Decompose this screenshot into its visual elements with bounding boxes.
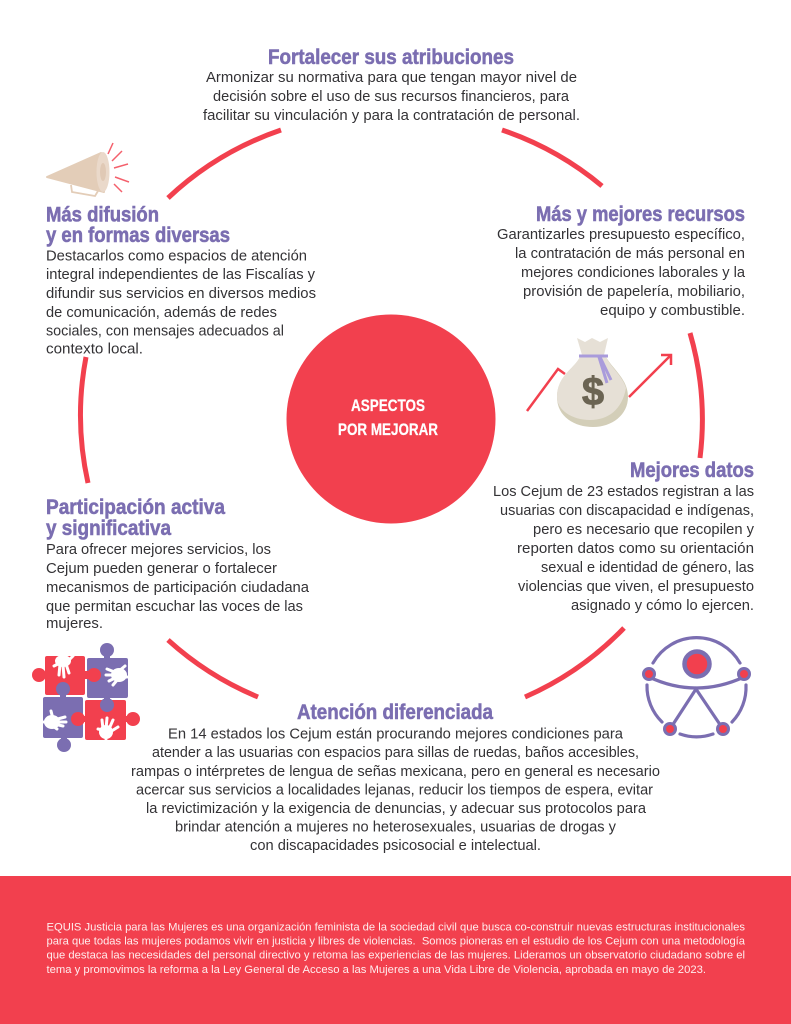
section: más difusión: Más difusión [46, 204, 159, 226]
section: participación activa: que permitan escuchar las voces de las [46, 599, 303, 615]
section: más y mejores recursos: equipo y combustible. [600, 303, 745, 319]
section: mejores datos: pero es necesario que recopilen y [533, 522, 755, 538]
section: más difusión: y en formas diversas [46, 224, 230, 247]
section: mejores datos: Los Cejum de 23 estados registran a las [493, 484, 754, 500]
section: mejores datos [493, 459, 755, 614]
section: más y mejores recursos [497, 203, 746, 319]
section: fortalecer sus atribuciones: Fortalecer sus atribuciones [268, 46, 514, 69]
center circle: aspectos por mejorar: ASPECTOS [351, 397, 425, 415]
section: más difusión [46, 204, 316, 358]
section: mejores datos: violencias que viven, el presupuesto [518, 579, 754, 595]
section: más y mejores recursos: Más y mejores recursos [536, 203, 745, 226]
section: atención diferenciada: con discapacidades psicosocial e intelectual. [250, 838, 541, 854]
section: más difusión: integral independientes de las Fiscalías y [46, 267, 316, 283]
section: más y mejores recursos: la contratación de más personal en [515, 246, 745, 262]
icon: money bag with rising arrow: $ [582, 370, 604, 414]
section: participación activa [46, 496, 310, 632]
ring of arc segments [81, 130, 702, 697]
section: atención diferenciada: atender a las usuarias con espacios para sillas de ruedas, baños accesibles, [152, 745, 639, 761]
center circle: aspectos por mejorar: POR MEJORAR [338, 421, 438, 439]
section: más y mejores recursos: provisión de papelería, mobiliario, [523, 284, 745, 300]
section: mejores datos: usuarias con discapacidad e indígenas, [500, 503, 754, 519]
section: participación activa: mujeres. [46, 616, 103, 632]
section: fortalecer sus atribuciones: facilitar su vinculación y para la contratación de personal. [203, 108, 580, 124]
footer panel: que destaca las necesidades del personal directivo y retoma las experiencias de las mujeres. Lideramos un observatorio ciudadano sobre el [46, 950, 745, 962]
hand: top left [54, 655, 73, 677]
section: atención diferenciada [131, 701, 660, 854]
section: más difusión: sociales, con mensajes adecuados al [46, 324, 284, 340]
section: atención diferenciada: rampas o intérpretes de lengua de señas mexicana, pero en general es necesario [131, 764, 660, 780]
section: más y mejores recursos: Garantizarles presupuesto específico, [497, 227, 745, 243]
section: participación activa: Participación activa [46, 496, 225, 519]
section: atención diferenciada: Atención diferenciada [297, 701, 493, 724]
section: más difusión: Destacarlos como espacios de atención [46, 248, 307, 264]
section: participación activa: Para ofrecer mejores servicios, los [46, 542, 271, 558]
section: participación activa: mecanismos de participación ciudadana [46, 580, 310, 596]
section: mejores datos: sexual e identidad de género, las [541, 560, 754, 576]
section: fortalecer sus atribuciones: Armonizar su normativa para que tengan mayor nivel de [206, 70, 577, 86]
section: más y mejores recursos: mejores condiciones laborales y la [521, 265, 746, 281]
section: participación activa: y significativa [46, 517, 171, 540]
section: mejores datos: asignado y cómo lo ejercen. [571, 598, 754, 614]
section: atención diferenciada: acercar sus servicios a localidades lejanas, reducir los tiempos de espera, evitar [136, 782, 653, 798]
section: atención diferenciada: En 14 estados los Cejum están procurando mejores condiciones para [168, 726, 624, 742]
section: participación activa: Cejum pueden generar o fortalecer [46, 561, 277, 577]
hand: top right [106, 666, 127, 685]
section: atención diferenciada: la revictimización y la exigencia de denuncias, y adecuar sus protocolos para [146, 801, 647, 817]
section: atención diferenciada: brindar atención a mujeres no heterosexuales, usuarias de drogas y [175, 820, 617, 836]
section: mejores datos: Mejores datos [630, 459, 754, 482]
section: mejores datos: reporten datos como su orientación [517, 541, 754, 557]
icon: puzzle with hands [32, 643, 140, 752]
section: más difusión: contexto local. [46, 342, 143, 358]
icon: megaphone [47, 143, 129, 196]
hand: bottom left [44, 711, 66, 729]
hand: bottom right [98, 718, 118, 739]
footer panel: para que todas las mujeres podamos vivir en justicia y libres de violencias. Somos pioneras en el estudio de los Cejum con una metodología [46, 936, 746, 948]
footer panel: tema y promovimos la reforma a la Ley General de Acceso a las Mujeres a una Vida Libre de Violencia, aprobada en mayo de 2023. [46, 964, 706, 976]
section: fortalecer sus atribuciones [203, 46, 580, 124]
icon: money bag with rising arrow [527, 338, 671, 427]
footer panel [0, 876, 791, 1024]
icon: accessibility human figure [644, 638, 750, 737]
center circle: aspectos por mejorar [286, 314, 496, 524]
section: fortalecer sus atribuciones: decisión sobre el uso de sus recursos financieros, para [213, 89, 570, 105]
section: más difusión: de comunicación, además de redes [46, 305, 277, 321]
section: más difusión: difundir sus servicios en diversos medios [46, 286, 316, 302]
footer panel: EQUIS Justicia para las Mujeres es una organización feminista de la sociedad civil que busca co-construir nuevas estructuras institucionales [46, 922, 745, 934]
